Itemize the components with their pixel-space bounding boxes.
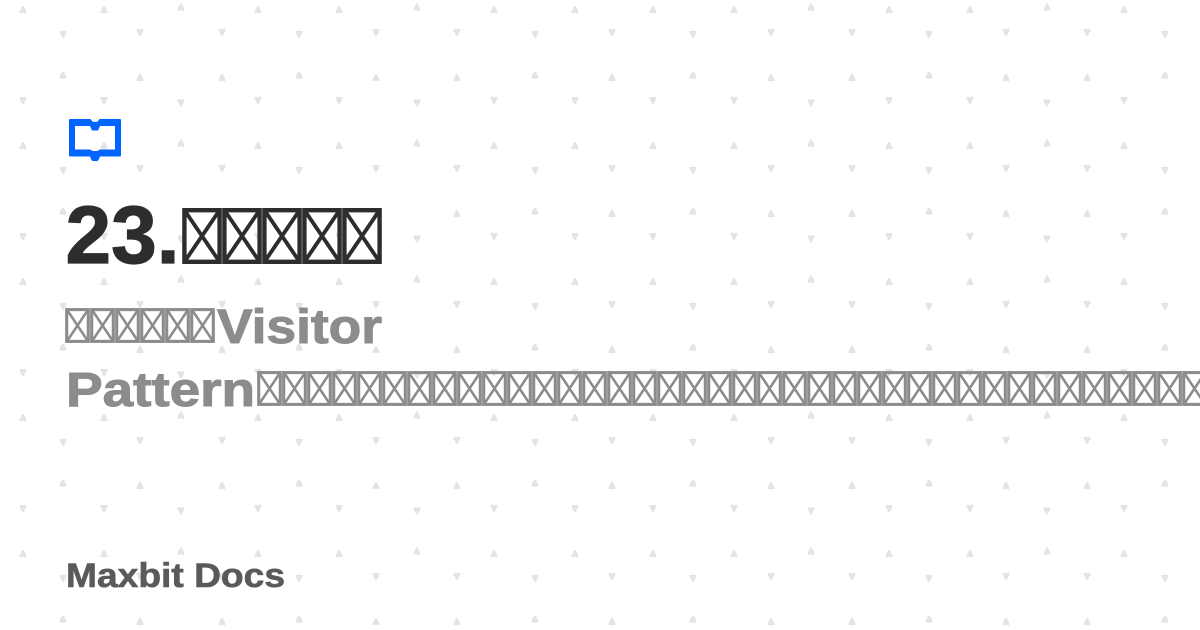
subtitle line 2 missing-glyph boxes (257, 371, 1200, 406)
title number: 23. (66, 190, 180, 281)
icon: open book (69, 119, 121, 161)
title missing-glyph boxes (182, 208, 382, 264)
title (66, 190, 382, 281)
subtitle (65, 301, 1200, 417)
subtitle word: Pattern: Pattern (66, 364, 255, 417)
subtitle line 1 missing-glyph boxes (65, 308, 215, 343)
subtitle word: Visitor: Visitor (217, 301, 382, 354)
brand name: Maxbit Docs (66, 557, 285, 595)
